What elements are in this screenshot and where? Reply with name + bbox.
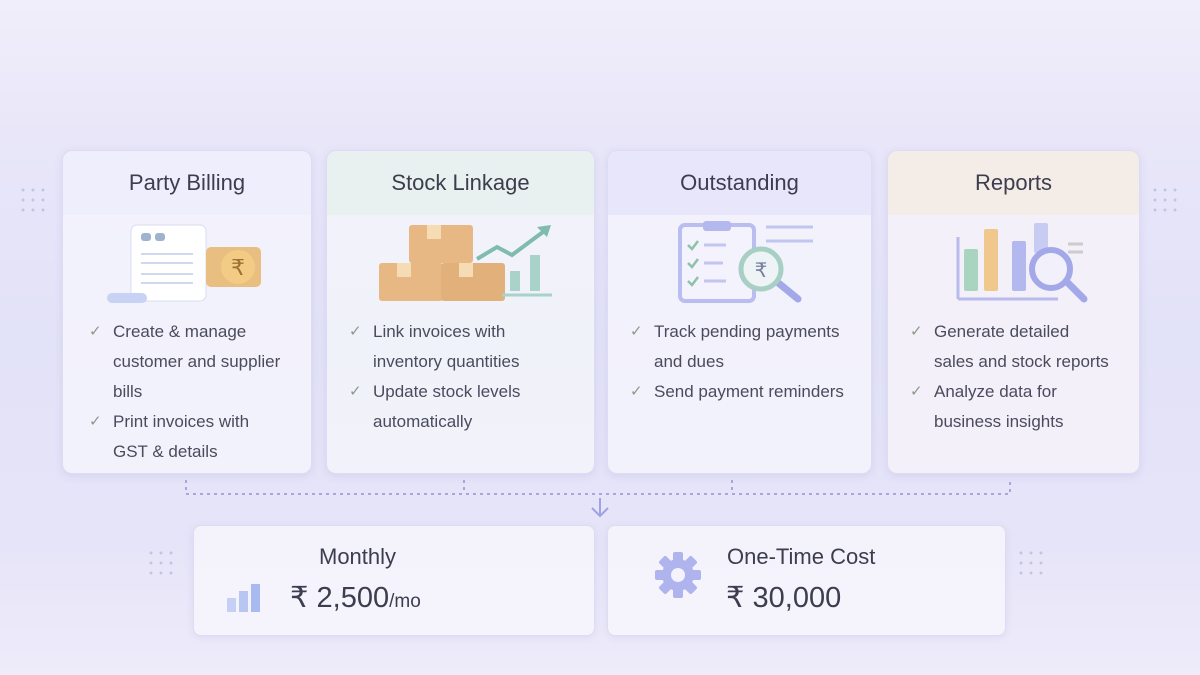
bullets: party billing: bills: [113, 382, 142, 401]
heading: party billing: Party Billing: [129, 170, 245, 195]
heading: outstanding: Outstanding: [680, 170, 799, 195]
bullets: stock linkage: automatically: [373, 412, 472, 431]
bullets: reports: sales and stock reports: [934, 352, 1109, 371]
bullets: outstanding: [632, 322, 844, 401]
bullets: party billing: Create & manage: [113, 322, 246, 341]
icon: invoice with rupee coin: ₹: [231, 255, 245, 280]
panel: one-time cost: [607, 525, 1006, 636]
connector: dotted lines to arrow: [185, 480, 1011, 518]
bullets: stock linkage: inventory quantities: [373, 352, 519, 371]
bullets: party billing: GST & details: [113, 442, 218, 461]
value: one-time cost: ₹ 30,000: [726, 582, 841, 614]
bullets: party billing: Print invoices with: [113, 412, 249, 431]
icon: gear: [655, 552, 701, 598]
bullets: party billing: customer and supplier: [113, 352, 280, 371]
label: monthly: Monthly: [319, 544, 396, 569]
icon: bars: [227, 584, 260, 612]
label: one-time cost: One-Time Cost: [727, 544, 875, 569]
value: monthly: ₹ 2,500/mo: [290, 582, 421, 614]
bullets: stock linkage: Update stock levels: [373, 382, 520, 401]
bullets: reports: business insights: [934, 412, 1063, 431]
panel: reports: [887, 150, 1140, 474]
bullets: stock linkage: Link invoices with: [373, 322, 505, 341]
panel: outstanding: [607, 150, 872, 474]
bullets: reports: [912, 322, 1109, 431]
icon: boxes with growth chart: [379, 225, 552, 301]
icon: clipboard with magnifier: [678, 221, 813, 303]
heading: reports: Reports: [975, 170, 1052, 195]
bullets: outstanding: Track pending payments: [654, 322, 840, 341]
heading: stock linkage: Stock Linkage: [391, 170, 530, 195]
icon: invoice with rupee coin: [107, 224, 261, 303]
bullets: party billing: [91, 322, 280, 461]
icon: clipboard with magnifier: ₹: [755, 260, 767, 282]
bullets: reports: Generate detailed: [934, 322, 1069, 341]
icon: bar chart with magnifier: [956, 223, 1088, 302]
panel: party billing: [62, 150, 312, 474]
panel: stock linkage: [326, 150, 595, 474]
bullets: stock linkage: [351, 322, 520, 431]
bullets: outstanding: Send payment reminders: [654, 382, 844, 401]
panel: monthly cost: [193, 525, 595, 636]
bullets: outstanding: and dues: [654, 352, 724, 371]
bullets: reports: Analyze data for: [934, 382, 1057, 401]
